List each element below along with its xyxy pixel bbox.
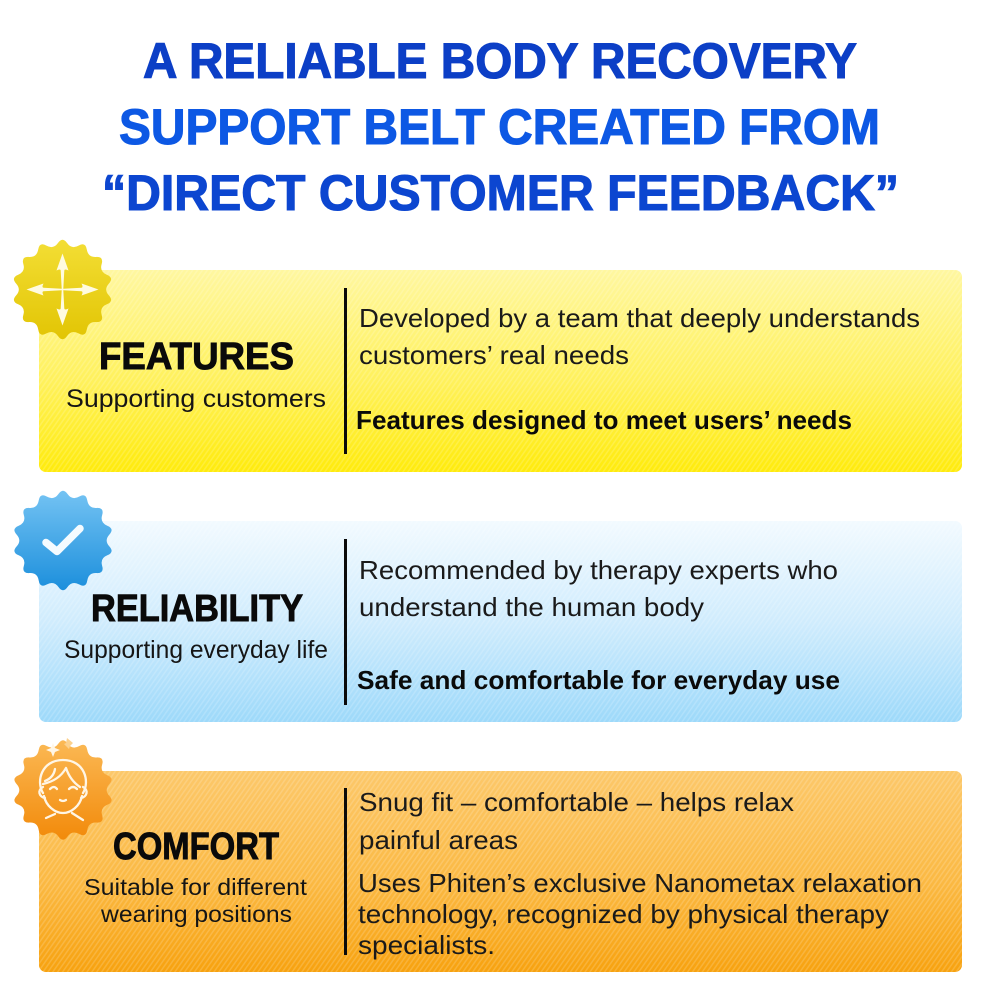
- heading: reliability: RELIABILITY: [91, 588, 303, 630]
- subheading: comfort: [84, 874, 308, 927]
- text block: reliability: [357, 555, 840, 695]
- text block: comfort: technology, recognized by physical therapy: [358, 899, 889, 929]
- title: “DIRECT CUSTOMER FEEDBACK”: [102, 165, 899, 221]
- text block: reliability: Recommended by therapy experts who: [359, 555, 838, 585]
- subheading: comfort: Suitable for different: [84, 874, 308, 900]
- text block: features: Features designed to meet users’ needs: [356, 405, 852, 435]
- subheading: features: Supporting customers: [66, 385, 326, 413]
- text block: comfort: painful areas: [359, 825, 518, 855]
- text block: comfort: Snug fit – comfortable – helps relax: [359, 787, 794, 817]
- title: A RELIABLE BODY RECOVERY: [143, 33, 857, 89]
- title: SUPPORT BELT CREATED FROM: [119, 99, 880, 155]
- text block: features: [356, 303, 920, 435]
- text block: comfort: specialists.: [358, 930, 495, 960]
- text block: comfort: Uses Phiten’s exclusive Nanometax relaxation: [358, 868, 922, 898]
- subheading: reliability: Supporting everyday life: [64, 636, 328, 664]
- subheading: comfort: wearing positions: [100, 901, 292, 927]
- text block: reliability: Safe and comfortable for everyday use: [357, 665, 840, 695]
- icon: smiling face badge: [14, 738, 112, 840]
- text block: features: customers’ real needs: [359, 340, 629, 370]
- panel: comfort: [14, 738, 962, 972]
- panel: reliability: [14, 491, 962, 722]
- title: [102, 33, 899, 221]
- text block: comfort: [358, 787, 922, 960]
- text block: reliability: understand the human body: [359, 592, 704, 622]
- panel: features: [14, 240, 962, 472]
- heading: features: FEATURES: [99, 336, 294, 378]
- icon: four arrows badge: [14, 240, 111, 339]
- heading: comfort: COMFORT: [113, 826, 279, 868]
- icon: check badge: [14, 491, 112, 590]
- text block: features: Developed by a team that deeply understands: [359, 303, 920, 333]
